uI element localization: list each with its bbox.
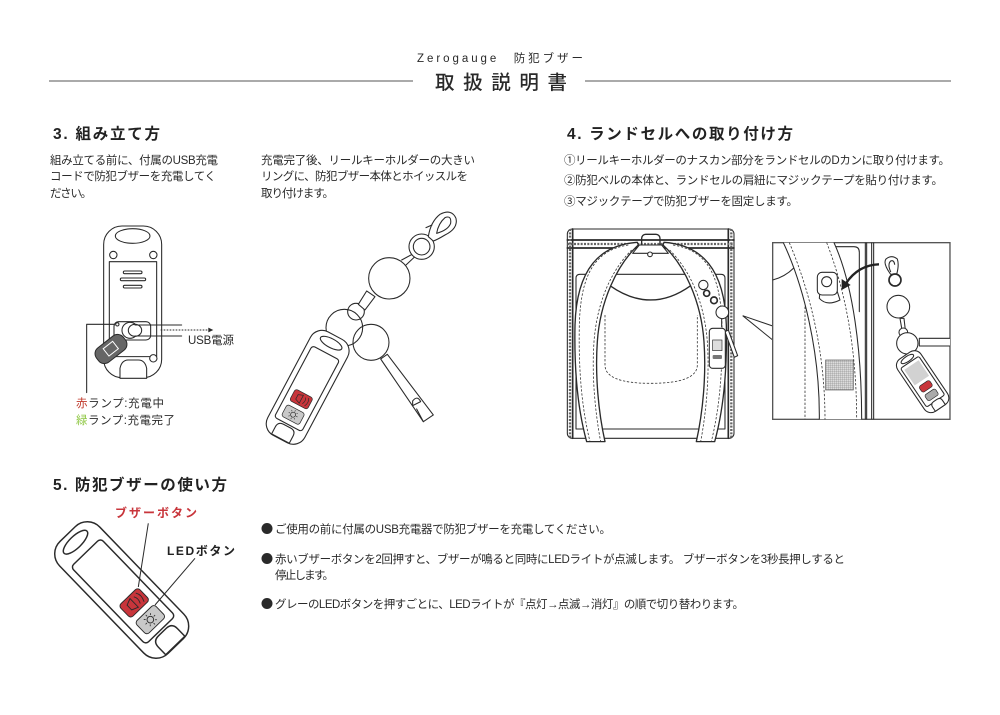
- leader line: buzzer button: [138, 523, 148, 587]
- bullet list: usage: 停止します。: [275, 569, 334, 582]
- illustration: buzzer front: [48, 515, 196, 665]
- clasp: [426, 212, 456, 241]
- left strap: [575, 242, 638, 442]
- label: USB power: USB電源: [188, 333, 234, 347]
- label: LED button: LEDボタン: [167, 544, 235, 558]
- illustration: reel key holder with buzzer and whistle: [262, 212, 456, 449]
- text: assembly step two: 取り付けます。: [261, 187, 334, 200]
- heading: section 3: 3. 組み立て方: [53, 124, 160, 143]
- legend: lamp colours: [76, 397, 175, 427]
- text: assembly step one: 組み立てる前に、付属のUSB充電: [50, 153, 218, 167]
- bullet list: usage: 赤いブザーボタンを2回押すと、ブザーが鳴ると同時にLEDライトが点滅します。 ブザーボタンを3秒長押しすると: [275, 552, 845, 566]
- heading: section 5: 5. 防犯ブザーの使い方: [53, 475, 227, 494]
- icon: D ring: [817, 272, 840, 303]
- text: attachment steps: ③マジックテープで防犯ブザーを固定します。: [564, 194, 798, 208]
- text: assembly step one: ださい。: [50, 187, 92, 200]
- text: assembly step one: [50, 153, 218, 200]
- heading: section 4: 4. ランドセルへの取り付け方: [567, 124, 793, 143]
- text: attachment steps: ②防犯ベルの本体と、ランドセルの肩紐にマジックテープを貼り付けます。: [564, 173, 943, 187]
- bullet list: usage: グレーのLEDボタンを押すごとに、LEDライトが『点灯→点滅→消灯』の順で切り替わります。: [275, 597, 744, 611]
- velcro patch: [826, 360, 853, 390]
- fob: [896, 350, 950, 414]
- legend: lamp colours: 緑ランプ:充電完了: [76, 414, 175, 427]
- fob: [262, 326, 354, 449]
- whistle: [919, 338, 952, 346]
- label: buzzer button: ブザーボタン: [115, 505, 197, 520]
- legend: lamp colours: 赤ランプ:充電中: [76, 397, 164, 410]
- right strap: [663, 242, 726, 442]
- bullet list: usage: ご使用の前に付属のUSB充電器で防犯ブザーを充電してください。: [275, 522, 611, 536]
- panel: attachment detail: [773, 243, 952, 419]
- callout pointer: [743, 316, 773, 340]
- text: assembly step one: コードで防犯ブザーを充電してく: [50, 169, 216, 183]
- text: assembly step two: [261, 153, 475, 200]
- title rule right: [585, 80, 951, 82]
- text: attachment steps: [564, 153, 950, 208]
- title: 取扱説明書: [435, 72, 567, 94]
- mini key holder: [699, 280, 738, 368]
- clasp and reel: [885, 257, 918, 354]
- text: assembly step two: 充電完了後、リールキーホルダーの大きい: [261, 153, 475, 167]
- illustration: device back with USB charging: [87, 226, 213, 393]
- title rule left: [49, 80, 413, 82]
- text: attachment steps: ①リールキーホルダーのナスカン部分をランドセルのDカンに取り付けます。: [564, 153, 950, 167]
- leader line: LED button: [155, 558, 195, 605]
- bullet list: usage: [262, 522, 845, 611]
- arrow: [842, 264, 879, 290]
- text: assembly step two: リングに、防犯ブザー本体とホイッスルを: [261, 169, 468, 183]
- header: [49, 51, 951, 94]
- icon: usb tag: [92, 331, 130, 367]
- illustration: backpack: [567, 229, 738, 442]
- whistle: [381, 354, 433, 422]
- product name: Zerogauge 防犯ブザー: [417, 51, 583, 65]
